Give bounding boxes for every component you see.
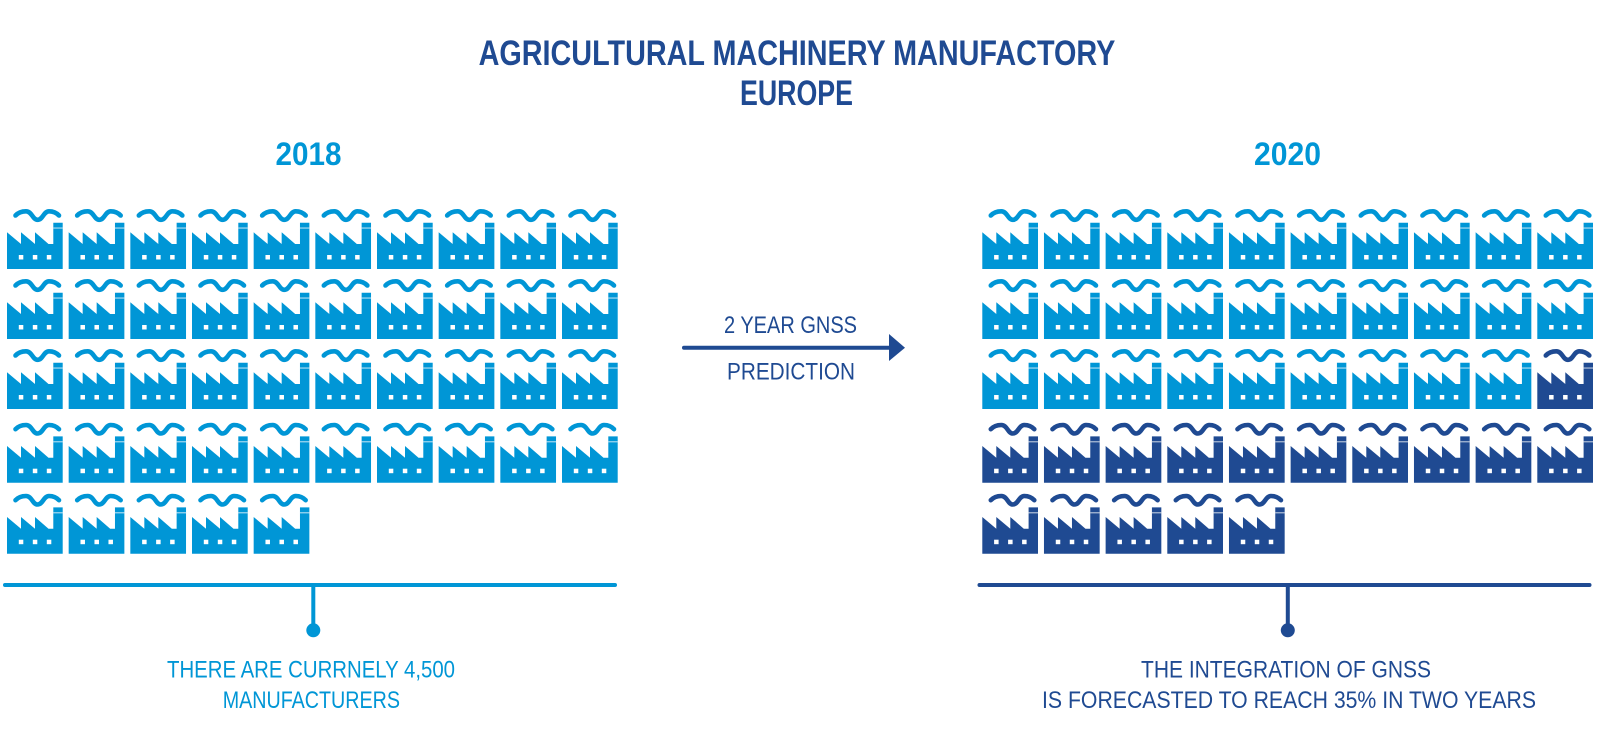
text: 2020 callout <box>1042 656 1536 714</box>
title: EUROPE <box>740 74 853 113</box>
arrow label <box>724 312 857 386</box>
pictogram grid: 2018 factories <box>7 211 618 554</box>
factory row 5 <box>7 496 309 554</box>
text: 2018 callout: MANUFACTURERS <box>223 687 400 714</box>
heading: 2020: 2020 <box>1254 136 1321 172</box>
arrow: 2 year prediction <box>682 334 905 361</box>
GNSS factory row 4 <box>982 425 1593 483</box>
icon: GNSS factory <box>1537 351 1593 409</box>
title: AGRICULTURAL MACHINERY MANUFACTORY <box>479 34 1115 73</box>
GNSS factory row 5 <box>982 496 1285 554</box>
factory row 1 <box>7 211 618 269</box>
pictogram grid: 2020 factories <box>982 211 1593 554</box>
text: 2018 callout <box>167 656 455 714</box>
heading: 2018: 2018 <box>276 136 342 172</box>
factory row 3 <box>982 351 1531 409</box>
factory row 2 <box>982 281 1593 339</box>
arrow label: 2 YEAR GNSS <box>724 312 857 339</box>
bracket: 2018 callout line <box>3 583 617 637</box>
factory row 3 <box>7 351 618 409</box>
text: 2020 callout: THE INTEGRATION OF GNSS <box>1141 656 1431 684</box>
bracket: 2020 callout line <box>978 583 1592 637</box>
factory row 2 <box>7 281 618 339</box>
text: 2020 callout: IS FORECASTED TO REACH 35% IN TWO YEARS <box>1042 687 1536 714</box>
text: 2018 callout: THERE ARE CURRNELY 4,500 <box>167 656 455 684</box>
factory row 1 <box>982 211 1593 269</box>
arrow label: PREDICTION <box>727 358 855 386</box>
factory row 4 <box>7 425 618 483</box>
title <box>479 34 1115 113</box>
